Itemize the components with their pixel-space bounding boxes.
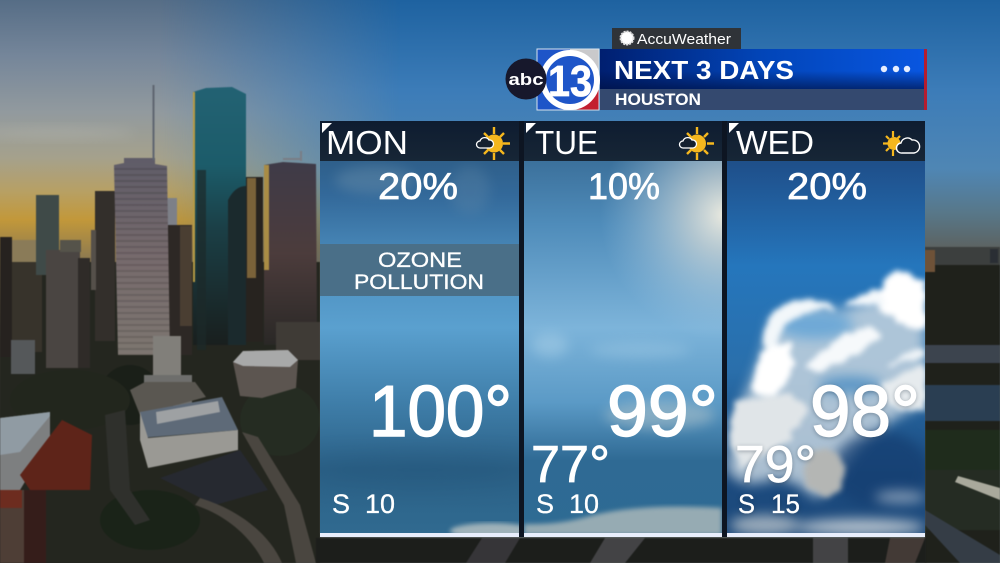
cloud mass: soft shaded base: [727, 285, 928, 535]
text: wind: S: [332, 489, 350, 519]
background: downtown Houston skyline: [0, 85, 320, 563]
convention building: [0, 412, 50, 490]
octagon building: [233, 350, 298, 398]
band: ozone pollution: POLLUTION: [354, 270, 484, 294]
right tower: [264, 162, 317, 345]
annex: [140, 397, 238, 438]
background: city to the right: [925, 247, 1000, 563]
text: high temperature: 100°: [369, 372, 512, 452]
panel: Monday: [320, 121, 519, 537]
band: ozone pollution: [320, 244, 519, 296]
header: TUE: [524, 121, 722, 161]
white-gray tower: [114, 158, 170, 355]
band: ozone pollution: OZONE: [378, 248, 462, 272]
banner: AccuWeather tag: [612, 28, 741, 49]
text: location: HOUSTON: [615, 90, 701, 109]
logo: abc 13: 13: [548, 57, 592, 106]
text: wind: 10: [365, 489, 395, 519]
text: title: NEXT 3 DAYS: [614, 55, 794, 85]
background: highway under panels: [316, 538, 926, 563]
text: low temperature: 79°: [735, 436, 816, 494]
teal tower: [193, 87, 246, 345]
text: precipitation chance: 10%: [588, 166, 660, 207]
header: MON: [320, 121, 519, 161]
text: wind: 15: [771, 489, 800, 519]
text: wind: [332, 489, 395, 519]
icon: sun with cloud: [680, 127, 714, 160]
panel: Wednesday: [727, 121, 928, 537]
text: wind: [738, 489, 800, 519]
panel shadows: [519, 121, 524, 537]
text: wind: S: [536, 489, 554, 519]
text: high temperature: 99°: [607, 372, 718, 452]
panel shadows: [722, 121, 727, 537]
logo: abc 13: [506, 49, 599, 110]
banner: title: [600, 49, 927, 110]
text: precipitation chance: 20%: [787, 166, 867, 207]
text: wind: [536, 489, 599, 519]
icon: sun with cloud: [477, 127, 510, 160]
text: low temperature: 77°: [531, 436, 610, 494]
header: MON: MON: [326, 124, 408, 161]
text: precipitation chance: 20%: [378, 166, 458, 207]
header: WED: WED: [736, 124, 814, 161]
icon: sun and cloud: [883, 131, 920, 156]
cloud highlights: [730, 270, 925, 496]
parking lot and roads: [160, 450, 268, 505]
icon: AccuWeather sun: [620, 32, 634, 44]
header: TUE: TUE: [535, 124, 598, 161]
logo: abc circle: abc: [508, 70, 544, 89]
text: high temperature: 98°: [810, 372, 920, 452]
city hall: [153, 336, 181, 406]
park: [100, 365, 160, 425]
text: wind: S: [738, 489, 755, 519]
banner: AccuWeather tag: AccuWeather: [637, 31, 731, 48]
panel: Tuesday: [524, 121, 722, 537]
header: WED: [727, 121, 925, 161]
icon: three dots: [881, 66, 910, 72]
text: wind: 10: [569, 489, 599, 519]
